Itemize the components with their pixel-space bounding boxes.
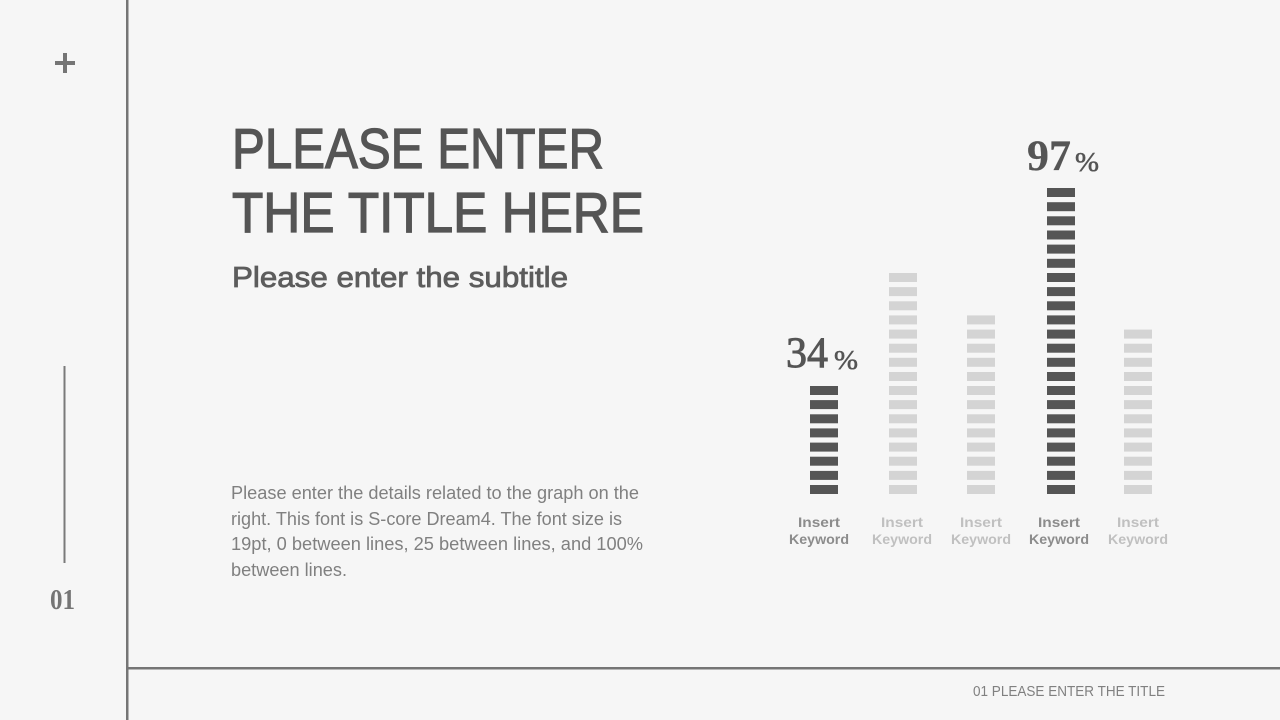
value label: 34%: % (834, 345, 858, 375)
bar chart (810, 188, 1152, 494)
title (232, 117, 644, 245)
value label: 34%: 34 (786, 330, 828, 377)
keyword label 1: Insert (798, 514, 840, 530)
body text (231, 483, 643, 580)
keyword label 2: Insert (881, 514, 923, 530)
title: PLEASE ENTER (232, 117, 604, 181)
keyword label 1: Keyword (789, 531, 849, 547)
value label: 97%: % (1075, 147, 1099, 177)
bar 1: 34% (810, 386, 838, 494)
body text: between lines. (231, 560, 347, 580)
keyword label 5: Insert (1117, 514, 1159, 530)
bar 4: 97% (1047, 188, 1075, 494)
footer title: 01 PLEASE ENTER THE TITLE (973, 684, 1165, 700)
keyword label 5 (1108, 514, 1168, 547)
body text: 19pt, 0 between lines, 25 between lines, and 100% (231, 534, 643, 554)
keyword label 3: Keyword (951, 531, 1011, 547)
keyword label 4: Insert (1038, 514, 1080, 530)
keyword label 4: Keyword (1029, 531, 1089, 547)
keyword label 2 (872, 514, 932, 547)
bar 2 (889, 273, 917, 494)
page number: 01 (50, 585, 75, 616)
value label: 34% (786, 330, 858, 377)
bar 5 (1124, 330, 1152, 494)
keyword label 3 (951, 514, 1011, 547)
sidebar vertical line (64, 366, 66, 563)
keyword label 2: Keyword (872, 531, 932, 547)
keyword label 3: Insert (960, 514, 1002, 530)
keyword label 1 (789, 514, 849, 547)
subtitle: Please enter the subtitle (232, 262, 568, 294)
body text: right. This font is S-core Dream4. The font size is (231, 509, 622, 529)
icon: plus (55, 53, 75, 73)
title: THE TITLE HERE (232, 181, 644, 245)
keyword label 4 (1029, 514, 1089, 547)
value label: 97% (1027, 133, 1099, 180)
value label: 97%: 97 (1027, 133, 1071, 180)
body text: Please enter the details related to the graph on the (231, 483, 639, 503)
keyword label 5: Keyword (1108, 531, 1168, 547)
bar 3 (967, 315, 995, 494)
